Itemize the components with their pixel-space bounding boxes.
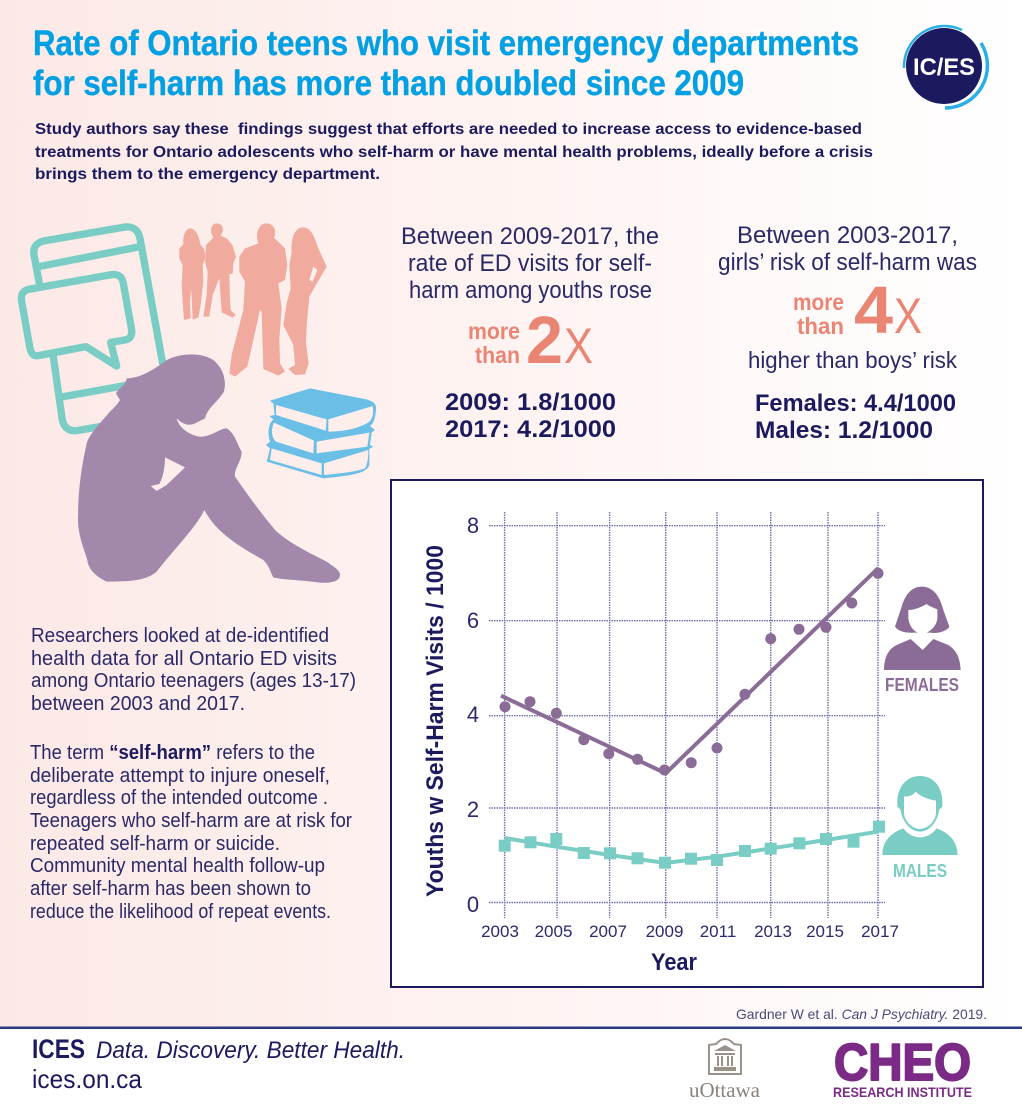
y-axis tick labels: 2 [467,797,479,822]
more than 4X callout: than [797,313,844,339]
text block: self-harm definition [30,742,352,923]
text block: self-harm definition: after self-harm has been shown to [30,878,311,900]
icon: group of teens [179,223,327,377]
stat description: Between 2003-2017, [737,222,958,249]
more than 2X callout: than [475,342,520,368]
female trend line and points [500,568,884,776]
footer divider [0,1026,1022,1029]
x-axis tick labels: 2015 [806,922,844,941]
comparison text: higher than boys’ risk [748,347,957,373]
icon: seated figure silhouette [78,354,340,583]
male trend line and points [499,821,885,869]
rates by year [445,389,616,443]
stat description: harm among youths rose [409,277,652,304]
footer: ICES tagline and website: Data. Discovery. Better Health. [96,1037,405,1064]
logo: uOttawa [689,1039,761,1102]
rates by sex: Males: 1.2/1000 [755,417,933,444]
title: Rate of Ontario teens who visit emergency departments [33,24,859,63]
y-axis tick labels: 4 [467,702,479,727]
text block: self-harm definition: regardless of the intended outcome . [30,787,328,809]
stat block: ED visits rose more than 2X [401,223,659,443]
more than 4X callout: X [894,288,922,344]
more than 4X callout: more [793,289,844,315]
title [33,24,859,103]
icon: female legend [884,587,961,695]
rates by sex [755,390,956,444]
citation: Gardner W et al. Can J Psychiatry. 2019. [736,1006,987,1022]
y-axis tick labels: 8 [467,513,479,538]
x-axis tick labels: 2003 [481,922,519,941]
footer: ICES tagline and website: ICES [32,1034,85,1064]
text block: self-harm definition: Teenagers who self-harm are at risk for [30,810,352,832]
x-axis tick labels: 2005 [535,922,572,941]
y-axis tick labels [467,513,479,917]
logo: CHEO Research Institute: CHEO [834,1034,971,1092]
x-axis tick labels: 2009 [646,922,683,941]
text block: study description [31,625,356,715]
stat description [718,222,977,276]
y-axis title: Youths w Self-Harm Visits / 1000 [422,545,449,897]
x-axis title: Year [651,949,697,976]
stat description: rate of ED visits for self- [408,250,652,277]
x-axis tick labels: 2011 [700,922,736,941]
title: for self-harm has more than doubled since 2009 [33,64,744,103]
text block: self-harm definition: reduce the likelihood of repeat events. [30,901,331,923]
y-axis tick labels: 0 [467,892,479,917]
intro text: treatments for Ontario adolescents who self-harm or have mental health problems, ideally before a crisis [35,144,873,161]
footer: ICES tagline and website: ices.on.ca [32,1064,142,1094]
text block: self-harm definition: The term “self-harm” refers to the [30,742,315,764]
footer: ICES tagline and website [32,1034,405,1094]
text block: study description: Researchers looked at de-identified [31,625,329,647]
more than 4X callout: 4 [854,273,893,348]
stat description: girls’ risk of self-harm was [718,249,977,276]
rates by sex: Females: 4.4/1000 [755,390,956,417]
logo: IC/ES [904,26,987,108]
logo: IC/ES: IC/ES [913,54,975,81]
text block: study description: health data for all Ontario ED visits [31,648,337,670]
illustration: phone, teens, books and sitting figure [21,223,376,583]
text block: self-harm definition: repeated self-harm or suicide. [30,833,280,855]
logo: uOttawa: uOttawa [689,1078,761,1102]
x-axis tick labels [481,922,899,941]
y-axis tick labels: 6 [467,608,479,633]
more than 4X callout [793,273,922,348]
text block: study description: among Ontario teenagers (ages 13-17) [31,670,356,692]
rates by year: 2009: 1.8/1000 [445,389,616,416]
text block: self-harm definition: Community mental health follow-up [30,855,325,877]
icon: phone with chat bubble [21,227,163,431]
icon: male legend [882,776,958,881]
rates by year: 2017: 4.2/1000 [445,416,616,443]
logo: CHEO Research Institute: RESEARCH INSTITUTE [833,1084,972,1100]
icon: male legend: MALES [893,860,947,881]
icon: stack of books [266,388,376,478]
stat description: Between 2009-2017, the [401,223,659,250]
more than 2X callout [468,303,593,378]
stat description [401,223,659,304]
icon: female legend: FEMALES [885,674,959,695]
more than 2X callout: 2 [526,303,563,378]
intro text: Study authors say these findings suggest that efforts are needed to increase access to evidence-based [35,121,862,138]
more than 2X callout: X [564,318,593,374]
text block: self-harm definition: deliberate attempt to injure oneself, [30,765,330,787]
text block: study description: between 2003 and 2017. [31,693,245,715]
intro text [35,121,873,183]
stat block: girls' risk more than 4X [718,222,977,444]
intro text: brings them to the emergency department. [35,166,380,183]
more than 2X callout: more [468,318,520,344]
x-axis tick labels: 2017 [861,922,899,941]
panel: line chart of youth self-harm visits [391,480,983,987]
x-axis tick labels: 2013 [754,922,792,941]
x-axis tick labels: 2007 [589,922,627,941]
